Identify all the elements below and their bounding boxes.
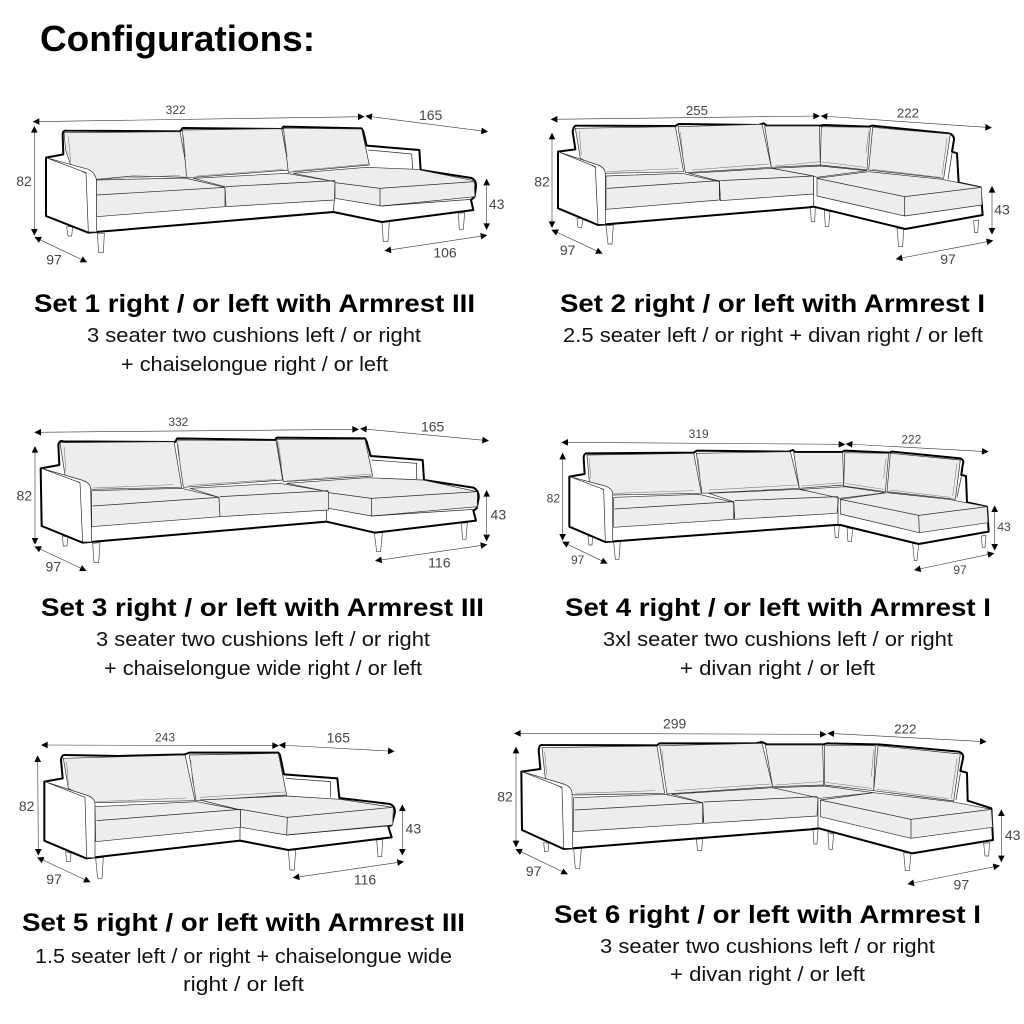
heading: set 2: Set 2 right / or left with Armrest I (560, 290, 985, 318)
dimensions: set 1: 43 (489, 196, 505, 212)
heading: set 5: Set 5 right / or left with Armrest III (22, 909, 465, 937)
heading: set 4: Set 4 right / or left with Armrest I (565, 594, 991, 622)
dimensions: set 3: 116 (428, 555, 451, 571)
dimensions: set 2: 43 (994, 201, 1010, 217)
dimensions: set 1: 82 (16, 173, 32, 189)
dimensions: set 6: 82 (497, 789, 513, 805)
dimensions: set 1 (16, 103, 505, 268)
dimensions: set 6: 299 (663, 715, 687, 731)
dimensions: set 4: 97 (571, 553, 585, 567)
dimensions: set 6: 222 (894, 721, 916, 736)
description: set 2: 2.5 seater left / or right + divan right / or left (563, 325, 983, 347)
dimensions: set 1: 97 (46, 252, 62, 268)
dimensions: set 5: 243 (155, 731, 175, 745)
dimensions: set 5: 43 (406, 820, 421, 836)
description: set 6 (600, 936, 935, 986)
description: set 5: right / or left (183, 974, 304, 996)
dimensions: set 4: 43 (997, 520, 1011, 534)
dimensions: set 3: 165 (421, 418, 445, 434)
dimensions: set 6 (497, 715, 1021, 892)
panel: set 1 (16, 103, 505, 376)
sofa drawing: set 1 (46, 127, 476, 253)
dimensions: set 2: 97 (560, 242, 576, 258)
dimensions: set 5: 82 (19, 798, 35, 814)
description: set 5 (35, 946, 452, 996)
dimensions: set 2: 97 (940, 251, 956, 267)
dimensions: set 4: 319 (689, 427, 709, 441)
dimensions: set 3: 43 (491, 506, 506, 522)
description: set 3 (96, 629, 430, 680)
description: set 4: + divan right / or left (680, 658, 875, 680)
dimensions: set 3: 97 (46, 558, 61, 574)
dimensions: set 3: 332 (168, 415, 189, 429)
description: set 4 (603, 629, 953, 680)
dimensions: set 1: 165 (419, 107, 443, 123)
sofa drawing: set 4 (569, 450, 989, 561)
description: set 3: + chaiselongue wide right / or left (104, 658, 422, 680)
panel: set 6 (497, 715, 1021, 986)
dimensions: set 4 (547, 427, 1011, 577)
dimensions: set 4: 97 (953, 563, 967, 577)
dimensions: set 5: 116 (354, 871, 376, 887)
panel: set 3 (17, 415, 506, 680)
description: set 3: 3 seater two cushions left / or right (96, 629, 430, 651)
panel: set 4 (547, 427, 1011, 680)
heading: set 3: Set 3 right / or left with Armrest III (41, 594, 484, 622)
description: set 4: 3xl seater two cushions left / or right (603, 629, 953, 651)
sofa drawing: set 5 (44, 753, 395, 878)
dimensions: set 2: 222 (897, 105, 919, 120)
dimensions: set 5 (19, 730, 421, 887)
dimensions: set 3 (17, 415, 506, 574)
description: set 1 (87, 325, 421, 376)
sofa drawing: set 2 (558, 123, 983, 247)
description: set 5: 1.5 seater left / or right + chaiselongue wide (35, 946, 452, 968)
dimensions: set 3: 82 (17, 488, 32, 504)
description: set 6: + divan right / or left (670, 964, 865, 986)
dimensions: set 2: 255 (686, 103, 708, 118)
sofa drawing: set 3 (41, 438, 479, 563)
dimensions: set 1: 106 (433, 245, 457, 261)
heading: set 6: Set 6 right / or left with Armrest I (554, 901, 981, 929)
description: set 6: 3 seater two cushions left / or right (600, 936, 935, 958)
dimensions: set 6: 43 (1005, 827, 1021, 843)
panel: set 2 (534, 103, 1010, 347)
dimensions: set 2: 82 (534, 174, 550, 190)
sofa drawing: set 6 (521, 742, 993, 871)
dimensions: set 1: 322 (166, 103, 186, 117)
panel: set 5 (19, 730, 465, 996)
heading: set 1: Set 1 right / or left with Armrest III (34, 290, 475, 318)
dimensions: set 5: 165 (327, 730, 350, 746)
dimensions: set 6: 97 (526, 863, 542, 879)
dimensions: set 4: 222 (901, 432, 922, 446)
title: Configurations: (40, 18, 315, 59)
description: set 1: 3 seater two cushions left / or right (87, 325, 421, 347)
description: set 1: + chaiselongue right / or left (121, 354, 388, 376)
dimensions: set 5: 97 (46, 871, 62, 887)
dimensions: set 2 (534, 103, 1010, 267)
dimensions: set 4: 82 (547, 492, 560, 506)
dimensions: set 6: 97 (954, 876, 969, 892)
